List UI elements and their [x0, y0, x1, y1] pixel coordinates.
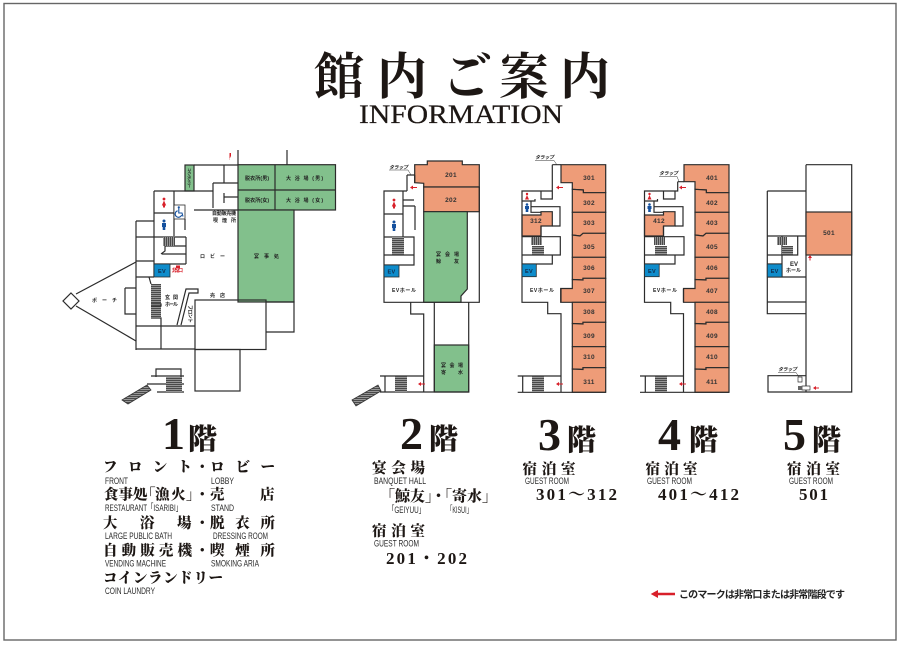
floor 2 facility list: 宴会場	[372, 457, 426, 478]
room 201	[415, 161, 479, 187]
room numbers: 411	[706, 379, 718, 386]
banquet hall: 宴 事 処	[254, 253, 279, 260]
room numbers: 407	[706, 288, 718, 295]
floor 5 facility list	[787, 458, 840, 504]
floor 4 facility list	[646, 458, 739, 504]
floor 1 facility list: 自動販売機	[103, 540, 194, 560]
floor 3 heading: 3	[538, 409, 561, 460]
room numbers: 410	[706, 354, 718, 361]
room numbers: 412	[653, 218, 665, 225]
floor 1 facility list	[103, 456, 276, 597]
floor 1 facility list: COIN LAUNDRY	[105, 586, 155, 597]
restroom icon: women	[392, 199, 396, 208]
floor 4 heading: 4	[658, 409, 681, 460]
building outline	[767, 165, 852, 392]
restroom icon: women	[525, 193, 529, 200]
stairs	[654, 237, 667, 392]
elevator: EV	[525, 269, 533, 275]
floor plan: 2nd floor	[352, 161, 479, 406]
guest rooms	[644, 165, 729, 392]
banquet hall Kisui: 宴 会 場	[441, 362, 463, 369]
lower block	[195, 350, 240, 391]
floor 2 facility list	[372, 457, 497, 568]
elevator	[767, 264, 782, 277]
room numbers: 311	[583, 379, 595, 386]
floor 2 facility list: BANQUET HALL	[374, 476, 426, 487]
floor 1 facility list: ロビー	[210, 456, 275, 477]
shop block	[195, 300, 266, 350]
banquet hall	[238, 210, 294, 302]
room numbers: 403	[706, 220, 718, 227]
floor 2 facility list: 201・202	[386, 549, 467, 568]
floor labels: 自動販売機	[212, 210, 236, 217]
floor 3 facility list: GUEST ROOM	[525, 476, 569, 487]
trap label: タラップ	[389, 164, 409, 171]
floor 1 facility list: 売	[210, 484, 225, 504]
walls	[640, 182, 729, 392]
coin laundry: コインランドリー	[187, 168, 192, 188]
floor 2 facility list: 「GEIYUU」	[388, 505, 425, 516]
trap label: タラップ	[535, 154, 555, 161]
EV hall label	[786, 262, 801, 274]
floor 1 facility list: RESTAURANT「ISARIBI」	[105, 503, 182, 514]
room numbers: 401	[706, 175, 718, 182]
floor 5 facility list: 501	[799, 485, 828, 504]
banquet hall Kisui	[434, 345, 469, 392]
floor 2 facility list: 「KISUI」	[447, 505, 472, 516]
EV hall label: ホール	[786, 267, 801, 274]
wheelchair restroom icon	[174, 205, 185, 219]
trap label	[778, 366, 799, 377]
room numbers: 307	[583, 288, 595, 295]
trap label	[535, 154, 557, 165]
floor 1 facility list: FRONT	[105, 476, 128, 487]
floor labels: 玄 関	[165, 294, 178, 301]
floor plan: 3rd floor	[518, 154, 606, 392]
floor plan: 1st floor	[63, 150, 336, 404]
floor 2 facility list: GUEST ROOM	[374, 539, 419, 550]
floor 1 facility list: DRESSING ROOM	[213, 531, 268, 542]
floor 1 facility list: フロント	[103, 456, 192, 477]
room numbers	[653, 175, 718, 386]
porch	[63, 262, 136, 341]
room 501: 501	[823, 230, 835, 237]
elevator: EV	[771, 269, 779, 275]
floor 1 heading: 1	[162, 408, 185, 459]
floor 1 facility list: 大	[103, 512, 118, 533]
emergency arrows	[410, 186, 425, 386]
emergency arrows	[808, 255, 819, 390]
baths and changing rooms: 大 浴 場 (女)	[286, 197, 323, 204]
floor 1 facility list: 場	[177, 512, 192, 533]
floor 1 facility list: ・	[195, 484, 210, 504]
room numbers: 408	[706, 309, 718, 316]
floor 1 facility list: VENDING MACHINE	[105, 559, 166, 570]
floor 1 facility list: ・	[195, 456, 210, 477]
subtitle: INFORMATION	[359, 99, 563, 129]
baths and changing rooms: 脱衣所(男)	[245, 175, 269, 182]
trap label: タラップ	[659, 170, 679, 177]
restroom icon: women	[648, 193, 652, 200]
banquet hall Geiyuu: 宴 会 場	[436, 251, 459, 258]
room numbers: 310	[583, 354, 595, 361]
room numbers: 302	[583, 200, 595, 207]
floor 2 facility list: 「鯨友」・「寄水」	[380, 485, 497, 506]
floor 2 heading: 階	[429, 417, 458, 458]
room 202	[424, 187, 479, 212]
restroom icon: men	[162, 220, 166, 230]
floor 5 heading: 5	[783, 409, 806, 460]
trap label	[659, 170, 679, 182]
stairs and elevator: EV	[158, 269, 166, 275]
stairs	[531, 237, 544, 392]
room numbers: 308	[583, 309, 595, 316]
baths and changing rooms: 大 浴 場 (男)	[286, 175, 323, 182]
walls	[125, 165, 294, 350]
floor 1 facility list: 脱衣所	[210, 512, 276, 533]
stairs	[777, 237, 810, 390]
room numbers	[530, 175, 595, 386]
porch: ポ ー チ	[92, 297, 117, 304]
floor plan: 5th floor	[767, 165, 852, 392]
floor 4 heading: 階	[689, 418, 718, 459]
floor 4 facility list: GUEST ROOM	[647, 476, 692, 487]
floor 1 facility list: 店	[260, 484, 275, 504]
room 201: 201	[445, 172, 457, 179]
floor 3 facility list: 301～312	[536, 485, 617, 504]
elevator	[522, 264, 536, 277]
stairs and elevator	[149, 237, 175, 326]
floor 3 heading: 階	[567, 418, 596, 459]
restroom icon: men	[392, 220, 396, 231]
floor 1 facility list: 食事処「漁火」	[104, 484, 200, 504]
floor labels: ロ ビ ー	[200, 253, 225, 260]
floor labels: 非常口	[172, 267, 183, 274]
trap label	[389, 164, 411, 175]
room numbers: 312	[530, 218, 542, 225]
EV hall label: EVホール	[653, 287, 677, 294]
banquet hall Kisui: 寄 水	[441, 369, 463, 376]
floor 1 facility list: ・	[195, 512, 210, 533]
room numbers: 305	[583, 244, 595, 251]
floor labels: フロント	[186, 305, 192, 323]
floor 1 facility list: ・	[195, 540, 210, 560]
restroom icon: men	[525, 203, 529, 212]
room numbers: 303	[583, 220, 595, 227]
room numbers: 402	[706, 200, 718, 207]
EV hall label: EVホール	[392, 287, 416, 294]
room numbers: 409	[706, 333, 718, 340]
floor 3 facility list	[522, 458, 617, 504]
room numbers: 406	[706, 265, 718, 272]
floor 5 heading: 階	[812, 418, 841, 459]
floor labels: 喫 煙 所	[213, 217, 236, 224]
floor 3 facility list: 宿泊室	[522, 458, 576, 479]
floor 1 heading: 階	[188, 417, 217, 458]
floor labels: ホール	[165, 301, 178, 308]
room 501	[806, 212, 852, 255]
title: 館内ご案内	[314, 37, 610, 109]
banquet hall Geiyuu	[424, 212, 467, 302]
elevator: EV	[648, 269, 656, 275]
room 202: 202	[445, 197, 457, 204]
trap label: タラップ	[778, 366, 798, 373]
banquet hall Geiyuu: 鯨 友	[436, 258, 459, 265]
floor 1 facility list: LARGE PUBLIC BATH	[105, 531, 172, 542]
floor 1 facility list: 浴	[140, 512, 156, 533]
floor labels: 売 店	[210, 292, 225, 299]
floor 5 facility list: GUEST ROOM	[789, 476, 833, 487]
floor 1 facility list: STAND	[211, 503, 234, 514]
elevator: EV	[388, 270, 395, 276]
elevator	[384, 265, 399, 277]
floor 5 facility list: 宿泊室	[787, 458, 840, 479]
EV hall label: EV	[790, 262, 798, 268]
floor 1 facility list: SMOKING ARIA	[211, 559, 259, 570]
baths and changing rooms: 脱衣所(女)	[245, 197, 269, 204]
restroom icon: women	[162, 198, 166, 208]
elevator	[644, 264, 659, 277]
restroom icon: men	[648, 203, 652, 212]
floor 1 facility list: 喫煙所	[210, 540, 276, 560]
legend: emergency exit mark: このマークは非常口または非常階段です	[679, 588, 845, 601]
room numbers: 306	[583, 265, 595, 272]
room numbers: 405	[706, 244, 718, 251]
stairs	[352, 237, 407, 406]
floor 4 facility list: 宿泊室	[646, 458, 698, 479]
walls	[380, 175, 479, 392]
lower staircase	[122, 369, 184, 404]
guest rooms	[522, 165, 606, 392]
baths and changing rooms	[238, 150, 336, 210]
room numbers: 309	[583, 333, 595, 340]
emergency arrows	[176, 153, 231, 268]
floor 2 heading: 2	[400, 408, 423, 459]
room numbers: 301	[583, 175, 595, 182]
floor plan: 4th floor	[640, 165, 729, 392]
walls	[518, 165, 606, 392]
emergency arrows	[556, 186, 563, 386]
coin laundry	[185, 165, 194, 191]
EV hall label: EVホール	[530, 287, 554, 294]
emergency arrows	[679, 186, 686, 386]
floor 2 facility list: 宿泊室	[372, 520, 426, 541]
floor labels	[165, 210, 236, 323]
floor 1 facility list: LOBBY	[211, 476, 234, 487]
floor 4 facility list: 401～412	[658, 485, 739, 504]
floor 1 facility list: コインランドリー	[103, 567, 223, 588]
